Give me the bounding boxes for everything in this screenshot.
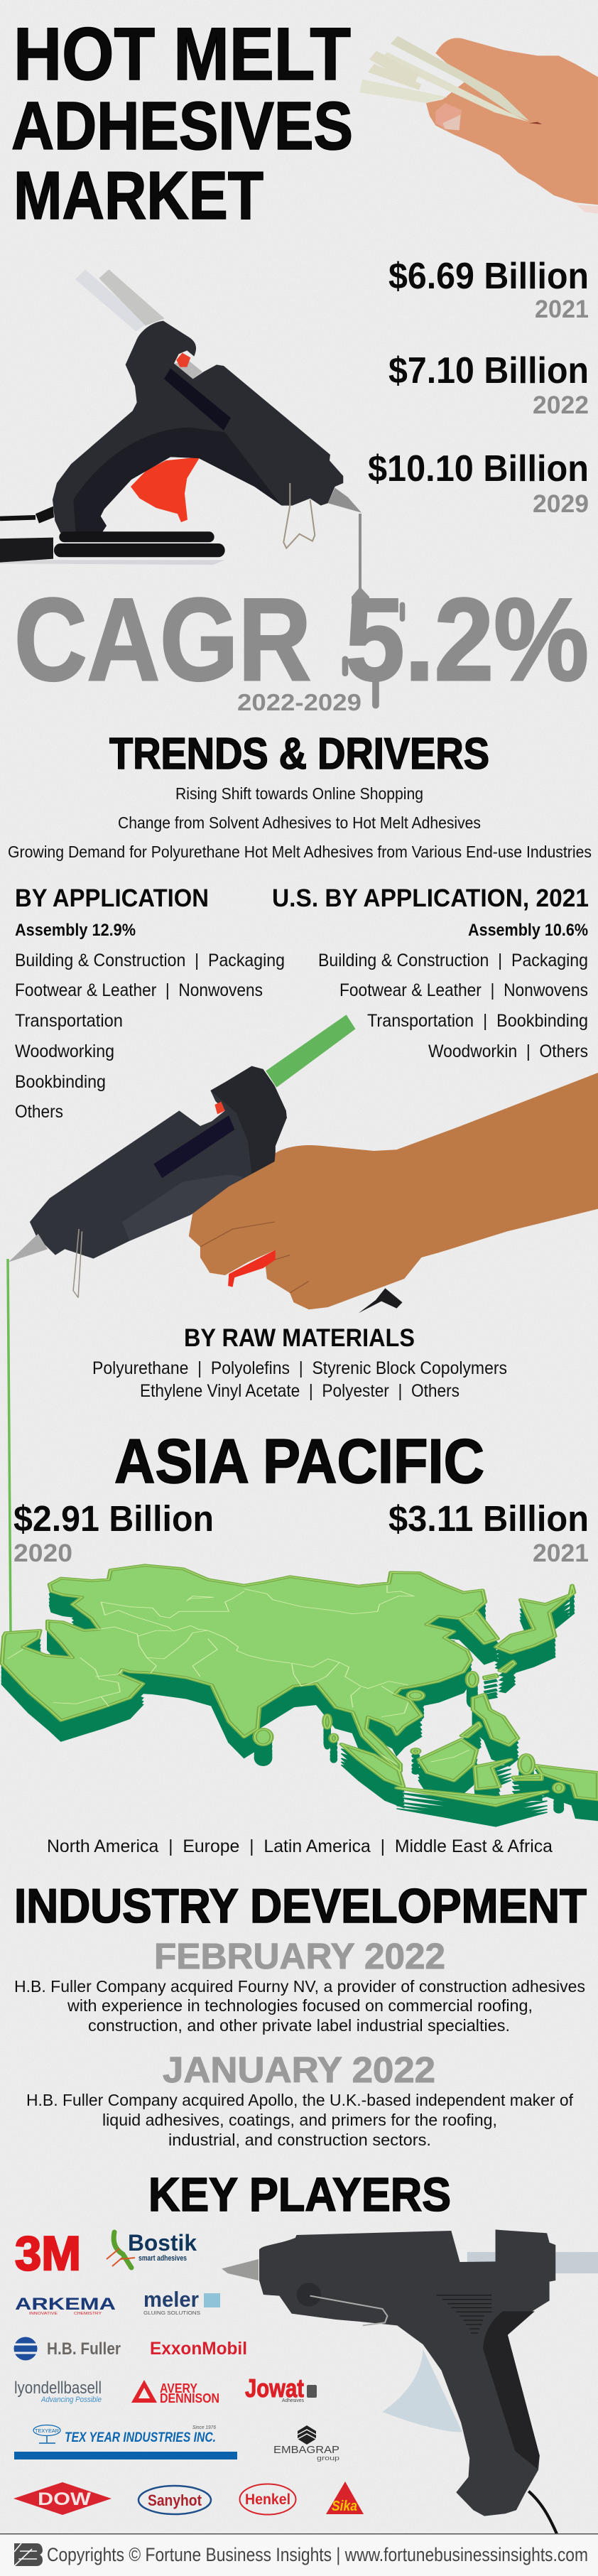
panel: U.S. by application: [272, 884, 589, 1061]
logo: Tex Year Industries: TEXYEAR: [35, 2429, 59, 2434]
market value 2022: 2022: [533, 391, 589, 419]
icon: glue gun side view: [222, 2229, 598, 2534]
Asia Pacific value 2020: [13, 1498, 214, 1567]
icon: hand using glue gun with green stick: [9, 1014, 598, 1313]
title: ADHESIVES: [11, 88, 353, 164]
text block: trends list: Change from Solvent Adhesives to Hot Melt Adhesives: [118, 813, 481, 832]
market value 2022: $7.10 Billion: [388, 350, 589, 391]
logo: Sanyhot: [138, 2486, 211, 2514]
development: February 2022: FEBRUARY 2022: [154, 1936, 445, 1976]
logo: Bostik: [107, 2230, 197, 2268]
market value 2029: [368, 448, 589, 518]
CAGR figure: 2022-2029: [237, 689, 361, 715]
logo: Tex Year Industries: TEX YEAR INDUSTRIES INC.: [65, 2430, 216, 2445]
glue drips on the five: [345, 605, 403, 705]
panel: by raw materials: Polyurethane | Polyolefins | Styrenic Block Copolymers: [92, 1358, 507, 1378]
logo: Meler: [143, 2287, 220, 2316]
logo: Dow: DOW: [38, 2489, 91, 2509]
panel: U.S. by application: Transportation | Bookbinding: [367, 1011, 588, 1031]
Asia Pacific value 2020: $2.91 Billion: [13, 1498, 214, 1539]
development: January 2022: H.B. Fuller Company acquired Apollo, the U.K.-based independent maker of: [26, 2091, 574, 2109]
logo: Meler: meler: [143, 2287, 199, 2312]
panel: by application: Woodworking: [15, 1041, 114, 1061]
panel: U.S. by application: Assembly 10.6%: [468, 921, 588, 940]
logo: Sika: Sika: [332, 2499, 357, 2514]
panel: by application: Footwear & Leather | Nonwovens: [15, 980, 263, 1000]
logo: Embagrap: [273, 2425, 339, 2462]
CAGR figure: [14, 574, 589, 715]
text: other regions: North America | Europe | Latin America | Middle East & Africa: [47, 1836, 553, 1856]
development: February 2022: construction, and other private label industrial specialties.: [88, 2016, 510, 2035]
heading: trends and drivers: TRENDS & DRIVERS: [109, 730, 489, 779]
logo: Henkel: [240, 2484, 295, 2515]
logo: Jowat: Adhesives: [282, 2398, 304, 2403]
market value 2029: 2029: [533, 490, 589, 518]
logo: ExxonMobil: ExxonMobil: [150, 2339, 247, 2359]
logo: Meler: GLUING SOLUTIONS: [143, 2311, 200, 2316]
logo: LyondellBasell: Advancing Possible: [40, 2396, 102, 2404]
panel: by application: Transportation: [15, 1011, 123, 1031]
market value 2021: [388, 256, 589, 323]
development: February 2022: H.B. Fuller Company acquired Fourny NV, a provider of construction adhesives: [14, 1977, 585, 1996]
logo: H.B. Fuller: H.B. Fuller: [47, 2339, 121, 2359]
logo: Jowat: Jowat: [245, 2374, 304, 2403]
map: Asia Pacific 3D: [2, 1565, 598, 1827]
title: MARKET: [13, 158, 263, 234]
panel: by application: Assembly 12.9%: [15, 921, 136, 940]
logo: LyondellBasell: [14, 2379, 102, 2404]
logo: Sika: [326, 2482, 364, 2514]
logo: Henkel: Henkel: [245, 2491, 290, 2508]
title: [11, 13, 353, 234]
development: February 2022: with experience in technologies focused on commercial roofing,: [67, 1996, 533, 2015]
market value 2021: $6.69 Billion: [388, 256, 589, 297]
logo: Avery Dennison: [131, 2380, 219, 2405]
Asia Pacific value 2021: 2021: [533, 1539, 589, 1567]
icon: hand holding glue sticks: [360, 36, 598, 214]
panel: by application: Others: [15, 1102, 63, 1122]
CAGR figure: CAGR: [14, 574, 311, 705]
logo: Avery Dennison: AVERY: [160, 2381, 197, 2396]
text block: trends list: Rising Shift towards Online Shopping: [175, 784, 423, 803]
icon: black glue gun with red trigger: [0, 269, 361, 565]
text block: trends list: [8, 784, 592, 861]
development: January 2022: liquid adhesives, coatings, and primers for the roofing,: [102, 2111, 497, 2129]
glue drip line: [352, 514, 369, 604]
logo: Arkema: [15, 2295, 116, 2316]
panel: by raw materials: Ethylene Vinyl Acetate | Polyester | Others: [140, 1381, 460, 1401]
logo: Arkema: CHEMISTRY: [74, 2312, 102, 2316]
market value 2029: $10.10 Billion: [368, 448, 589, 489]
development: January 2022: [26, 2050, 574, 2149]
logo: Arkema: INNOVATIVE: [29, 2312, 58, 2316]
panel: U.S. by application: U.S. BY APPLICATION, 2021: [272, 884, 589, 912]
title: HOT MELT: [13, 13, 351, 96]
logo: Dow: [13, 2482, 112, 2515]
market value 2022: [388, 350, 589, 419]
logo: Tex Year Industries: [14, 2425, 237, 2459]
icon: Fortune Business Insights logo: [14, 2543, 43, 2566]
logo: LyondellBasell: lyondellbasell: [14, 2379, 102, 2398]
logo: Embagrap: EMBAGRAP: [273, 2444, 339, 2456]
development: February 2022: [14, 1936, 585, 2035]
panel: by raw materials: [92, 1324, 507, 1401]
Asia Pacific value 2021: $3.11 Billion: [388, 1498, 589, 1539]
market value 2021: 2021: [535, 296, 589, 323]
development: January 2022: industrial, and construction sectors.: [168, 2131, 431, 2149]
heading: key players: KEY PLAYERS: [148, 2168, 451, 2221]
Asia Pacific value 2021: [388, 1498, 589, 1567]
panel: by raw materials: BY RAW MATERIALS: [184, 1324, 415, 1352]
panel: by application: Bookbinding: [15, 1072, 106, 1092]
footer bar: [0, 2533, 598, 2576]
logo: Embagrap: group: [317, 2455, 339, 2462]
panel: by application: [15, 884, 285, 1122]
logo: Arkema: ARKEMA: [15, 2295, 116, 2314]
logo: Avery Dennison: DENNISON: [160, 2391, 219, 2405]
green glue line: [8, 1259, 11, 1632]
panel: by application: Building & Construction | Packaging: [15, 951, 285, 970]
heading: Asia Pacific: ASIA PACIFIC: [114, 1426, 484, 1496]
logo: 3M: 3M: [15, 2226, 81, 2280]
logo: H.B. Fuller: [13, 2337, 121, 2360]
logo: Sanyhot: Sanyhot: [148, 2491, 202, 2509]
logo: Bostik: smart adhesives: [138, 2254, 187, 2263]
development: January 2022: JANUARY 2022: [163, 2050, 435, 2090]
logo: Tex Year Industries: Since 1976: [192, 2425, 216, 2430]
Asia Pacific value 2020: 2020: [13, 1539, 72, 1567]
logo: Bostik: Bostik: [128, 2230, 197, 2256]
panel: by application: BY APPLICATION: [15, 884, 209, 912]
